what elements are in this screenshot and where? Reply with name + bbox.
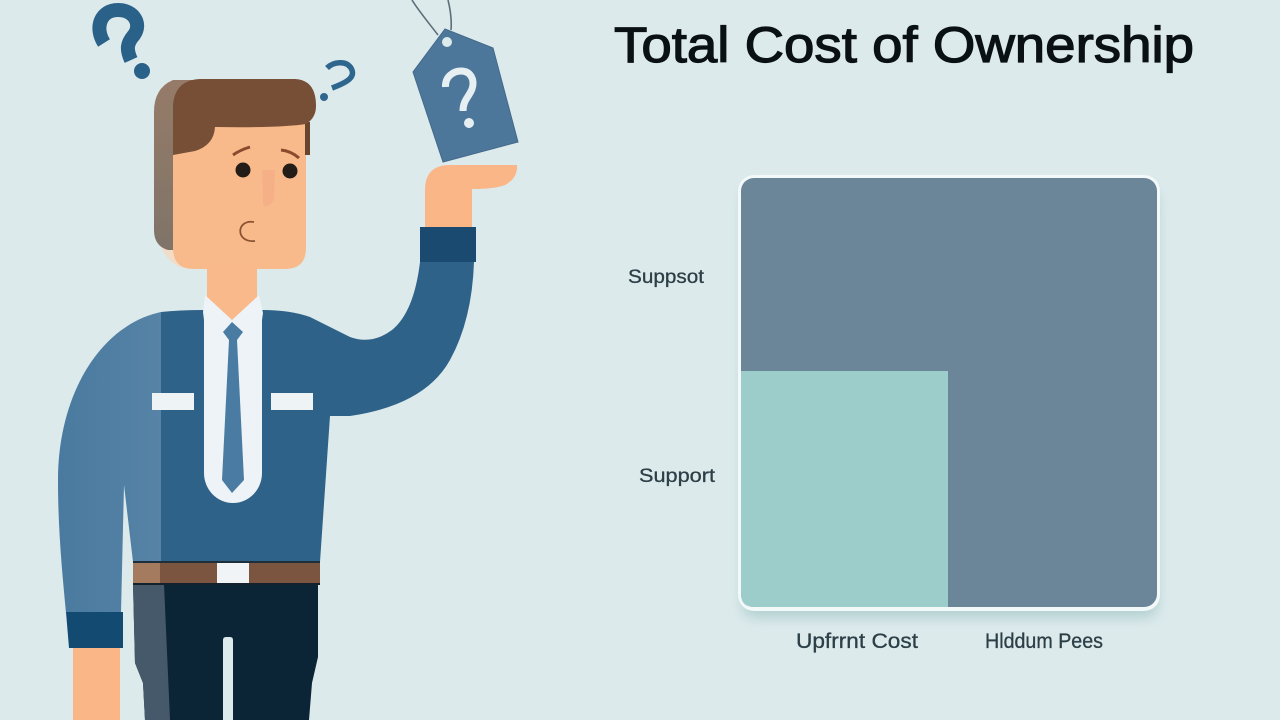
trousers light side <box>133 584 170 720</box>
lower hand <box>73 645 120 720</box>
icon: large question mark <box>99 10 150 79</box>
x-axis label upfront cost: Upfrrnt Cost <box>796 630 918 653</box>
raised hand <box>425 165 517 230</box>
mouth <box>240 222 255 241</box>
right pocket <box>271 393 313 410</box>
hidden fees area <box>741 178 1157 607</box>
belt <box>133 561 320 585</box>
left pocket <box>152 393 194 410</box>
title: Total Cost of Ownership <box>614 17 1194 73</box>
upfront cost area <box>741 371 948 607</box>
y-axis label lower: Support <box>639 465 716 487</box>
raised cuff <box>420 227 476 262</box>
chart: total cost square <box>738 175 1160 618</box>
icon: small question mark <box>320 63 352 101</box>
neck <box>207 265 257 323</box>
trousers <box>133 584 318 720</box>
x-axis label hidden fees: Hlddum Pees <box>985 630 1103 653</box>
eyes <box>236 162 250 178</box>
lower cuff <box>66 612 123 648</box>
shirt torso and raised arm <box>161 262 474 562</box>
shirt placket and collar <box>203 295 263 503</box>
tie <box>222 322 244 493</box>
person illustration <box>58 79 517 720</box>
y-axis label upper: Suppsot <box>628 266 705 288</box>
head <box>154 79 316 269</box>
sleeve <box>58 312 161 613</box>
icon: price tag with question mark <box>412 0 518 162</box>
eyebrows <box>233 147 250 155</box>
